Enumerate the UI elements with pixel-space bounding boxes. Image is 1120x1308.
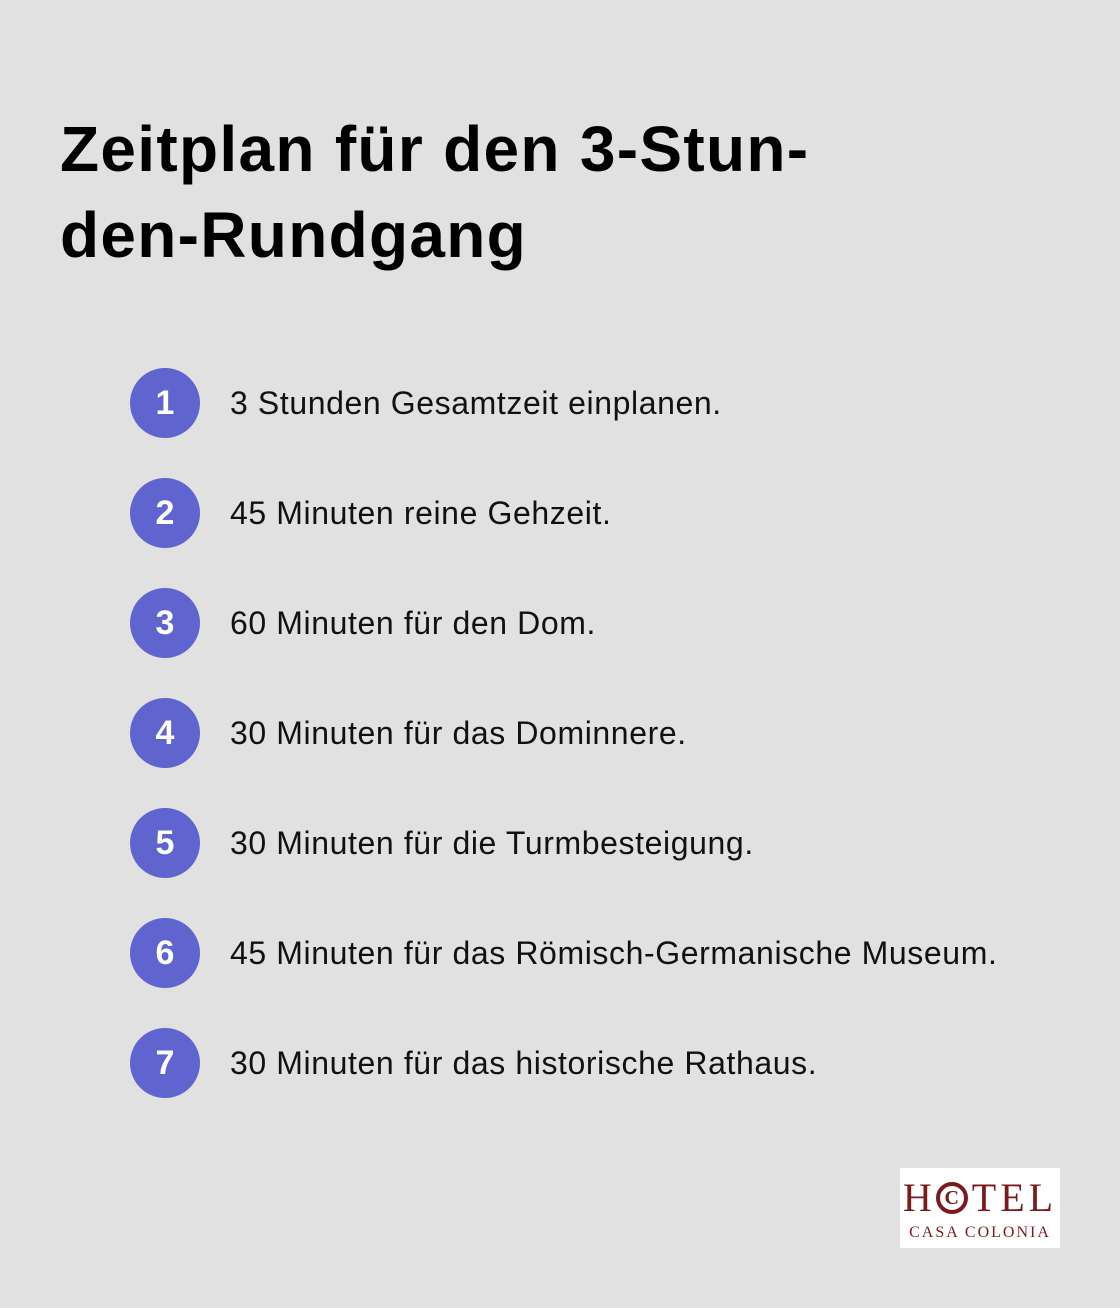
title: Zeitplan für den 3-Stun- [60, 113, 809, 185]
item 7 [130, 1028, 817, 1098]
item 2 [130, 478, 611, 548]
item 3 [130, 588, 596, 658]
title [60, 113, 809, 271]
logo: CASA COLONIA [909, 1224, 1051, 1241]
item 5: 5 [156, 824, 174, 862]
item 2: 2 [156, 494, 174, 532]
item 7: 7 [156, 1044, 174, 1082]
item 1 [130, 368, 722, 438]
item 6 [130, 918, 997, 988]
item 1: 1 [156, 384, 174, 422]
item 4: 30 Minuten für das Dominnere. [230, 715, 687, 751]
item 3: 60 Minuten für den Dom. [230, 605, 596, 641]
item 6: 45 Minuten für das Römisch-Germanische Museum. [230, 935, 997, 971]
item 4 [130, 698, 687, 768]
logo: C [945, 1187, 959, 1209]
item 5: 30 Minuten für die Turmbesteigung. [230, 825, 754, 861]
item 3: 3 [156, 604, 174, 642]
logo [900, 1168, 1060, 1248]
item 2: 45 Minuten reine Gehzeit. [230, 495, 611, 531]
item 6: 6 [156, 934, 174, 972]
item 1: 3 Stunden Gesamtzeit einplanen. [230, 385, 722, 421]
logo: H TEL [903, 1175, 1057, 1220]
item 4: 4 [156, 714, 174, 752]
item 5 [130, 808, 754, 878]
title: den-Rundgang [60, 199, 527, 271]
item 7: 30 Minuten für das historische Rathaus. [230, 1045, 817, 1081]
